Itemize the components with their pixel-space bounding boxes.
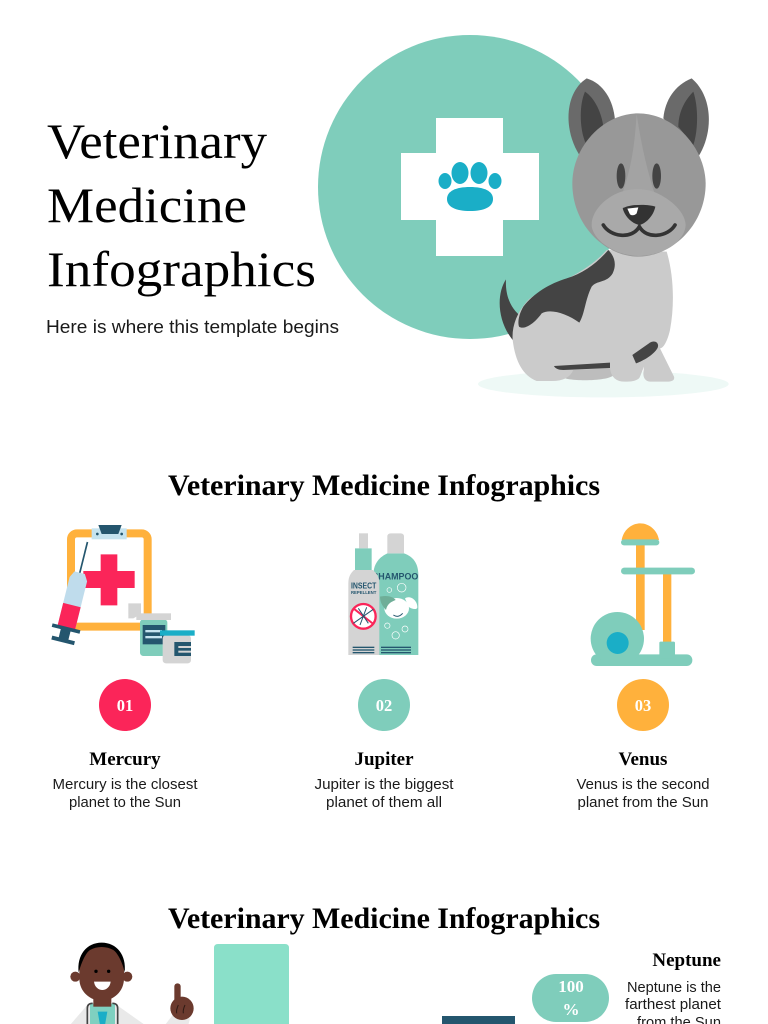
head [572, 113, 706, 257]
icon: shampoo and insect repellent bottles [348, 533, 418, 655]
icon: shampoo and insect repellent bottles: SHAMPOO [372, 571, 418, 581]
title: Veterinary [47, 113, 267, 169]
text block: Mercury [52, 749, 198, 811]
text block: Jupiter: planet of them all [326, 795, 442, 811]
ears [568, 78, 615, 158]
text block: Venus: Venus [619, 749, 667, 770]
text block: Jupiter [314, 749, 454, 811]
text block: Venus [576, 749, 710, 811]
bar: short navy [442, 1016, 515, 1024]
dog illustration [478, 78, 729, 397]
bar: tall mint [214, 944, 289, 1024]
step badge 01: 01 [117, 696, 133, 715]
text block: Neptune: Neptune [652, 950, 721, 971]
title: Medicine [47, 177, 247, 233]
value pill 100%: % [562, 1000, 580, 1019]
icon: shampoo and insect repellent bottles: REPELLENT [351, 590, 376, 595]
text block: Neptune: Neptune is the [627, 980, 721, 996]
icon: cat tower [591, 523, 695, 666]
text block: Neptune: farthest planet [625, 997, 721, 1013]
value pill 100%: 100 [558, 977, 584, 996]
icon: white cross [401, 118, 539, 256]
text block: Jupiter: Jupiter is the biggest [314, 777, 454, 793]
text block: Neptune [625, 950, 721, 1024]
section heading 2: Veterinary Medicine Infographics [168, 902, 600, 935]
text block: Venus: Venus is the second [576, 777, 710, 793]
text block: Jupiter: Jupiter [354, 749, 414, 770]
value pill 100% [532, 974, 609, 1022]
icon: clipboard with syringe and jars [49, 525, 195, 663]
text block: Mercury: Mercury is the closest [52, 777, 198, 793]
illustration: doctor [70, 943, 194, 1024]
step badge 03 [617, 679, 669, 731]
step badge 03: 03 [635, 696, 651, 715]
title [47, 113, 316, 297]
title: Infographics [47, 241, 316, 297]
section heading 1: Veterinary Medicine Infographics [168, 469, 600, 502]
text block: Mercury: planet to the Sun [69, 795, 181, 811]
subtitle: Here is where this template begins [46, 316, 339, 337]
icon: paw [438, 162, 502, 211]
hero illustration: circle with cross and paw [318, 35, 622, 339]
text block: Mercury: Mercury [89, 749, 161, 770]
icon: shampoo and insect repellent bottles: INSECT [351, 582, 376, 591]
step badge 01 [99, 679, 151, 731]
step badge 02 [358, 679, 410, 731]
text block: Venus: planet from the Sun [578, 795, 708, 811]
step badge 02: 02 [376, 696, 392, 715]
